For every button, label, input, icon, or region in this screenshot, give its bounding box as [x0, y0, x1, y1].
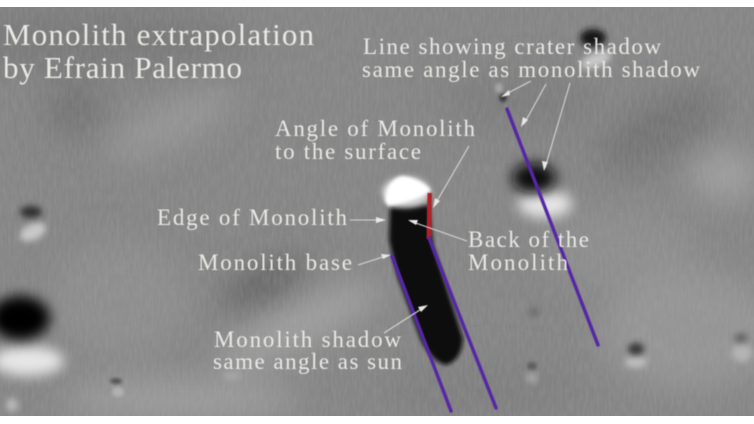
- arrow: angle of monolith: [433, 146, 469, 208]
- label: monolith shadow: [213, 327, 402, 374]
- purple line: monolith back: [429, 238, 496, 408]
- purple line: monolith base: [392, 256, 451, 411]
- label: monolith shadow: Monolith shadow: [214, 327, 401, 352]
- monolith glow: [382, 177, 430, 207]
- red line: angle of monolith: [426, 193, 432, 239]
- purple line: crater: [507, 109, 598, 345]
- label: angle of monolith: to the surface: [275, 139, 421, 164]
- label: back of the monolith: Back of the: [468, 227, 589, 252]
- monolith shadow: [389, 205, 463, 365]
- label: crater shadow line: same angle as monolith shadow: [362, 57, 700, 82]
- label: back of the monolith: Monolith: [468, 250, 568, 275]
- label: angle of monolith: Angle of Monolith: [275, 116, 476, 141]
- title: [3, 17, 314, 85]
- crater: small bottom left: [6, 378, 124, 412]
- arrow: monolith base: [358, 254, 391, 265]
- label: monolith shadow: same angle as sun: [213, 349, 402, 374]
- crater: top right: [579, 29, 613, 72]
- label: angle of monolith: [274, 119, 475, 160]
- arrow: crater 2: [542, 83, 570, 171]
- crater: large left: [0, 296, 64, 376]
- crater: upper left: [17, 206, 49, 245]
- labels: [3, 17, 700, 374]
- surface grain: [9, 7, 661, 396]
- arrow: line: [521, 84, 546, 127]
- arrow: edge of monolith: [350, 217, 386, 223]
- purple lines: [392, 109, 598, 411]
- label: crater shadow line: Line showing crater shadow: [363, 34, 661, 59]
- title: by Efrain Palermo: [3, 50, 242, 85]
- arrow: back of monolith: [408, 220, 467, 241]
- crater: small centre: [526, 307, 539, 383]
- monolith sunlit top: [385, 176, 431, 206]
- title: Monolith extrapolation: [3, 17, 314, 52]
- arrow: monolith shadow: [384, 305, 428, 333]
- pointer arrows: [350, 81, 570, 333]
- label: back of the monolith: [468, 230, 589, 271]
- crater: far right: [732, 333, 752, 362]
- arrow: crater 1: [501, 81, 531, 97]
- label: crater shadow line: [362, 34, 700, 82]
- crater: centre right on purple line: [512, 163, 572, 218]
- crater: small at line start: [495, 83, 507, 102]
- label: edge of monolith: Edge of Monolith: [157, 205, 348, 230]
- label: monolith base: Monolith base: [198, 250, 352, 275]
- crater: lower right: [625, 343, 647, 368]
